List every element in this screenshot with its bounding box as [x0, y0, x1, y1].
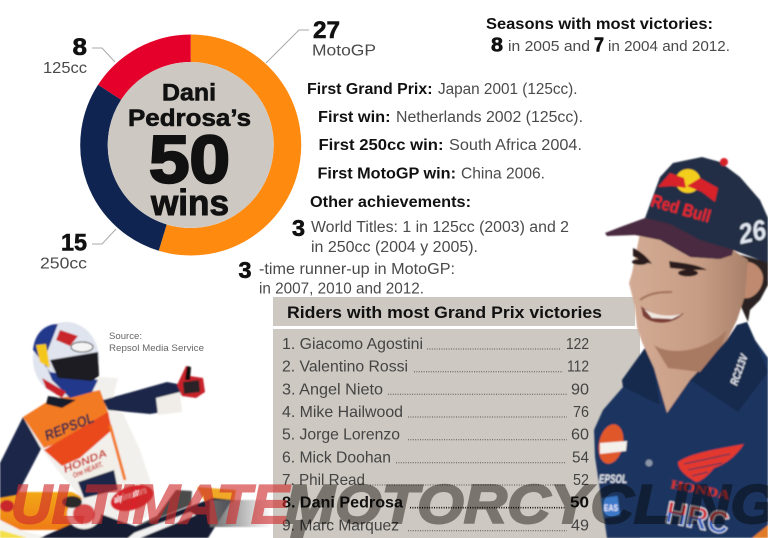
text block: first wins: First 250cc win:: [318, 137, 444, 154]
text block: other achievements: World Titles: 1 in 125cc (2003) and 2: [311, 219, 569, 236]
donut centre title: 50: [149, 122, 230, 198]
facial features: [632, 248, 707, 323]
text block: other achievements: Other achievements:: [310, 194, 471, 211]
text block: first wins: Japan 2001 (125cc).: [438, 81, 578, 98]
text block: other achievements: 3: [292, 215, 305, 241]
table heading: Riders with most Grand Prix victories: [287, 303, 602, 322]
donut centre title: [128, 80, 251, 223]
ranking list: 52: [573, 472, 589, 489]
watermark: MOTORCYCLING: [285, 473, 768, 535]
shirt logos: HONDA: [669, 477, 731, 502]
donut centre title: Pedrosa’s: [128, 105, 251, 132]
shirt: [594, 322, 768, 538]
donut centre title: Dani: [162, 80, 216, 107]
text block: first wins: South Africa 2004.: [449, 137, 582, 154]
text block: other achievements: -time runner-up in MotoGP:: [259, 261, 455, 278]
donut chart: wins by class: [94, 48, 287, 242]
motorcycle: [0, 487, 272, 538]
photo: Dani Pedrosa portrait: [594, 157, 768, 538]
callout: 8 125cc: 8: [72, 34, 87, 61]
ranking list: 4. Mike Hailwood: [282, 404, 403, 421]
text block: seasons with most victories: [486, 16, 730, 56]
segment: 125cc 8: [110, 48, 191, 92]
Repsol badge: [595, 422, 627, 466]
text block: first wins: First Grand Prix:: [307, 81, 432, 98]
callout: 15 250cc: [40, 229, 116, 273]
donut centre disc: [108, 62, 274, 228]
ranking list: 3. Angel Nieto: [282, 381, 383, 398]
watermark: [11, 473, 768, 538]
ranking list: 5. Jorge Lorenzo: [282, 427, 400, 444]
rider torso lettering: One HEART.: [71, 460, 104, 480]
callout: 15 250cc: 15: [61, 230, 87, 257]
face and neck: [629, 233, 748, 413]
text block: seasons with most victories: Seasons with most victories:: [486, 16, 713, 33]
text block: seasons with most victories: in 2004 and 2012.: [608, 38, 730, 55]
source note: Source:: [109, 331, 142, 342]
text block: first wins: China 2006.: [461, 166, 545, 182]
source note: [109, 331, 204, 354]
shirt logos: EPSOL: [599, 472, 627, 486]
ranking list: 50: [570, 495, 589, 512]
ranking list: 76: [573, 404, 589, 421]
donut centre title: wins: [150, 182, 229, 223]
ranking list: 112: [567, 359, 589, 376]
hair and ear: [722, 250, 768, 322]
callout: 27 MotoGP: 27: [313, 17, 340, 44]
text block: first wins: [307, 81, 583, 182]
text block: other achievements: in 2007, 2010 and 2012.: [259, 280, 424, 298]
rider torso lettering: REPSOL: [43, 410, 97, 445]
rider helmet: [33, 322, 99, 408]
text block: seasons with most victories: 7: [594, 34, 604, 56]
text block: other achievements: [238, 194, 569, 298]
ranking list: 60: [571, 427, 589, 444]
ranking list: 8. Dani Pedrosa: [282, 495, 403, 512]
ranking list: 122: [566, 336, 589, 353]
callout: 15 250cc: 250cc: [40, 256, 87, 273]
ranking list: 9. Marc Marquez: [282, 518, 399, 535]
segment: MotoGP 27: [163, 48, 287, 242]
ranking list: 49: [571, 518, 589, 535]
rider torso lettering: [43, 410, 109, 480]
watermark: ULTIMATE: [11, 473, 291, 535]
callout: 27 MotoGP: MotoGP: [312, 42, 376, 60]
cap: Red Bull: [649, 191, 713, 227]
callout: 8 125cc: [43, 34, 115, 77]
ranking list: 1. Giacomo Agostini: [282, 336, 423, 353]
shirt logos: EAS: [604, 503, 618, 513]
rider suit: [23, 377, 153, 527]
rider knee and glove on bike: alpinestars: [113, 485, 148, 505]
ranking list: 2. Valentino Rossi: [282, 359, 408, 376]
text block: first wins: First MotoGP win:: [318, 166, 456, 182]
callout: 8 125cc: 125cc: [43, 60, 87, 77]
rider right arm and glove: [103, 366, 205, 415]
Honda wing: [678, 444, 744, 482]
ranking list: 90: [571, 381, 589, 398]
rider torso lettering: HONDA: [62, 447, 109, 476]
source note: Repsol Media Service: [109, 343, 204, 354]
ranking list: 7. Phil Read: [282, 472, 365, 489]
RC logo: RC213V: [729, 352, 751, 387]
text block: other achievements: in 250cc (2004 y 2005).: [311, 239, 478, 256]
photo: rider on motorcycle with thumb up: [0, 322, 272, 538]
callout: 27 MotoGP: [266, 17, 376, 63]
cap: [605, 157, 768, 263]
panel: riders with most Grand Prix victories: [273, 297, 640, 538]
ranking list: 6. Mick Doohan: [282, 450, 391, 467]
ranking list: [273, 329, 640, 538]
rider knee and glove on bike: [62, 480, 157, 538]
ranking list: 54: [572, 450, 589, 467]
text block: seasons with most victories: in 2005 and: [508, 38, 590, 55]
segment: 250cc 15: [94, 92, 163, 238]
shirt logos: [595, 352, 751, 538]
rider left arm: [0, 417, 42, 498]
text block: first wins: First win:: [318, 109, 390, 126]
text block: first wins: Netherlands 2002 (125cc).: [396, 109, 583, 126]
text block: seasons with most victories: 8: [491, 34, 503, 56]
table heading: [273, 297, 635, 326]
text block: other achievements: 3: [238, 257, 252, 283]
